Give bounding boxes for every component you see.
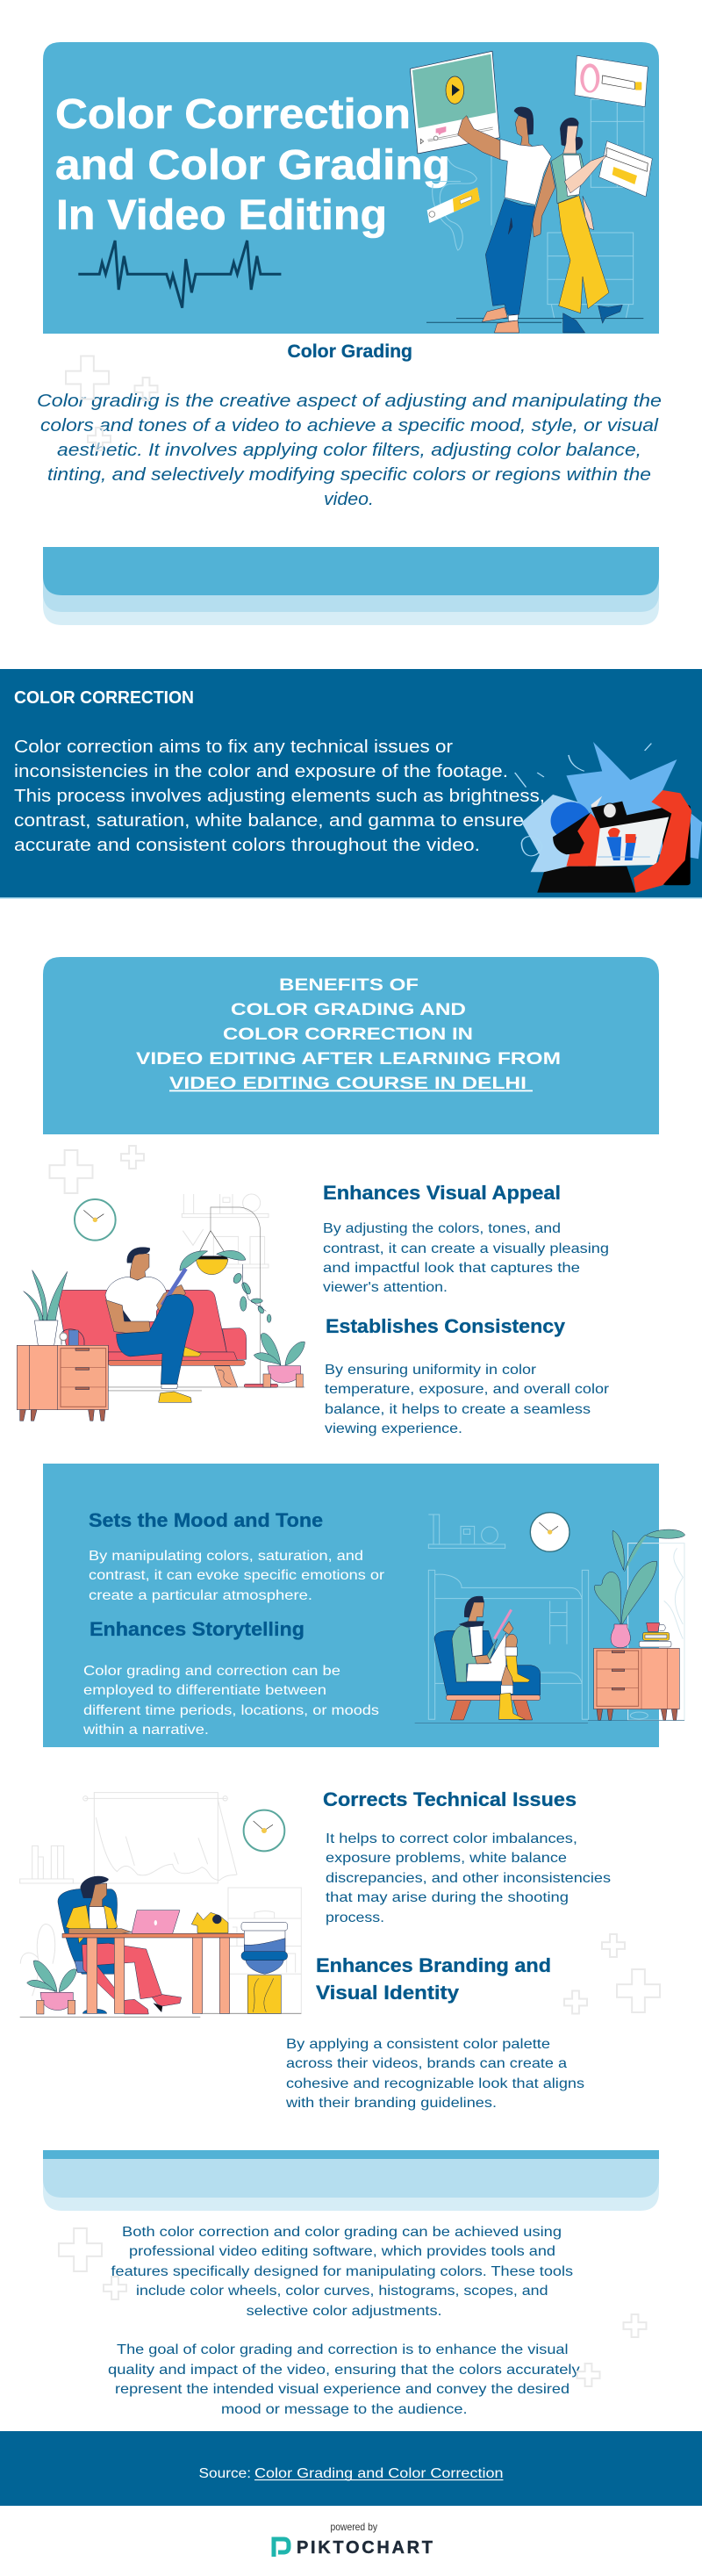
text block: color grading description: aesthetic. It involves applying color filters, adjusting color balance,	[57, 441, 641, 460]
text block: color correction description: Color correction aims to fix any technical issues or	[14, 738, 453, 757]
sofa	[57, 1290, 278, 1387]
illustration: woman at desk	[20, 1793, 301, 2017]
left plant	[24, 1270, 68, 1345]
man	[458, 107, 555, 333]
text block: closing paragraphs: represent the intended visual experience and convey the desired	[115, 2382, 569, 2397]
text block: corrects technical issues: exposure problems, white balance	[326, 1851, 567, 1866]
woman figure	[66, 1876, 182, 2014]
clock	[244, 1810, 284, 1851]
cabinet	[17, 1345, 108, 1421]
heading: corrects technical issues: Corrects Technical Issues	[323, 1788, 577, 1810]
laptop	[132, 1910, 180, 1933]
title	[55, 91, 450, 239]
cat	[191, 1912, 228, 1933]
text block: color correction description: inconsistencies in the color and exposure of the footage.	[14, 762, 508, 781]
clock	[75, 1199, 116, 1241]
heading: benefits: COLOR GRADING AND	[231, 1001, 466, 1019]
heading: benefits: COLOR CORRECTION IN	[223, 1025, 473, 1044]
plant and vase	[594, 1529, 685, 1648]
text block: corrects technical issues: discrepancies, and other inconsistencies	[326, 1871, 611, 1886]
text block: establishes consistency: By ensuring uniformity in color	[325, 1363, 537, 1378]
text block: closing paragraphs: professional video editing software, which provides tools and	[129, 2244, 555, 2259]
panel: hero banner	[43, 42, 659, 334]
panel: footer band	[0, 2431, 702, 2506]
form card	[599, 141, 652, 197]
text block: color correction description	[14, 738, 545, 855]
text block: enhances storytelling: employed to differentiate between	[83, 1683, 326, 1698]
text block: enhances branding: By applying a consistent color palette	[286, 2037, 550, 2052]
heading: benefits: VIDEO EDITING COURSE IN DELHI	[169, 1075, 526, 1093]
text block: corrects technical issues: It helps to correct color imbalances,	[326, 1831, 577, 1846]
decorative crosses	[59, 2228, 646, 2386]
text block: enhances branding: across their videos, brands can create a	[286, 2056, 567, 2071]
text block: establishes consistency: temperature, exposure, and overall color	[325, 1382, 610, 1397]
mug	[60, 1329, 84, 1345]
heading: benefits: VIDEO EDITING AFTER LEARNING FROM	[136, 1050, 561, 1069]
text block: closing paragraphs: selective color adjustments.	[247, 2304, 442, 2319]
text block: sets the mood and tone: By manipulating colors, saturation, and	[89, 1549, 363, 1564]
text block: corrects technical issues: process.	[326, 1910, 384, 1925]
text block: color correction description: accurate and consistent colors throughout the video.	[14, 836, 480, 855]
heading: enhances branding and visual identity: Visual Identity	[316, 1982, 460, 2004]
illustration: woman in armchair	[415, 1513, 685, 1723]
text block: enhances branding	[285, 2037, 584, 2111]
text block: corrects technical issues	[326, 1831, 611, 1925]
woman	[551, 118, 622, 333]
office chair	[58, 1889, 118, 2013]
pink pot plant	[254, 1334, 304, 1387]
text block: closing paragraphs: The goal of color grading and correction is to enhance the visual	[117, 2342, 569, 2357]
desk	[62, 1933, 259, 2013]
text block: establishes consistency: viewing experience.	[325, 1421, 462, 1436]
text block: closing paragraphs: mood or message to the audience.	[221, 2402, 468, 2417]
text block: color grading description: colors and tones of a video to achieve a specific mood, style, or visual	[40, 416, 659, 435]
cabinet	[594, 1648, 679, 1720]
heading: enhances visual appeal: Enhances Visual Appeal	[323, 1182, 561, 1204]
water cooler	[241, 1922, 288, 2013]
source line: Color Grading and Color Correction	[254, 2466, 504, 2481]
illustration: person with camera	[515, 742, 702, 893]
text block: color correction description: This process involves adjusting elements such as brightness,	[14, 787, 545, 806]
search bar	[427, 187, 480, 223]
heading: color grading: Color Grading	[288, 342, 412, 362]
profile card	[575, 55, 648, 107]
text block: enhances storytelling: different time periods, locations, or moods	[83, 1703, 379, 1718]
text block: establishes consistency	[325, 1363, 610, 1436]
text block: enhances visual appeal: viewer's attention.	[323, 1280, 448, 1295]
text block: enhances storytelling: Color grading and correction can be	[83, 1664, 340, 1679]
text block: color grading description: video.	[324, 490, 374, 509]
stacked rounded band	[43, 547, 659, 625]
text block: closing paragraphs	[108, 2225, 580, 2417]
decorative crosses	[49, 1146, 144, 1193]
title: In Video Editing	[56, 192, 387, 239]
text block: closing paragraphs: include color wheels, color curves, histograms, scopes, and	[136, 2284, 548, 2299]
text block: establishes consistency: balance, it helps to create a seamless	[325, 1402, 591, 1417]
text block: color grading description: Color grading is the creative aspect of adjusting and manipulating the	[37, 392, 662, 411]
icon: piktochart logo	[274, 2539, 289, 2557]
heading: enhances branding and visual identity	[316, 1954, 551, 2004]
heading: establishes consistency: Establishes Consistency	[326, 1315, 566, 1337]
text block: sets the mood and tone	[89, 1549, 385, 1603]
panel: mood and storytelling	[43, 1464, 659, 1747]
panel: benefits heading	[43, 957, 659, 1134]
pink pot plant	[27, 1961, 76, 2014]
illustration: man on sofa	[17, 1194, 304, 1421]
heading: benefits	[136, 976, 561, 1093]
armchair	[434, 1630, 541, 1720]
text block: sets the mood and tone: contrast, it can evoke specific emotions or	[89, 1568, 385, 1583]
illustration: two people with video panels	[410, 51, 652, 333]
heading: sets the mood and tone: Sets the Mood and Tone	[89, 1509, 323, 1531]
title: Color Correction	[55, 91, 411, 138]
woman figure	[452, 1596, 530, 1719]
stacked rounded band	[43, 2150, 659, 2211]
clock	[530, 1513, 569, 1551]
text block: enhances visual appeal: contrast, it can create a visually pleasing	[323, 1241, 609, 1256]
text block: sets the mood and tone: create a particular atmosphere.	[89, 1588, 312, 1603]
text block: color grading description: tinting, and selectively modifying specific colors or regions within the	[47, 465, 651, 485]
panel: color correction	[0, 669, 702, 899]
text block: color correction description: contrast, saturation, white balance, and gamma to ensure	[14, 811, 524, 831]
text block: closing paragraphs: quality and impact of the video, ensuring that the colors accurately	[108, 2363, 580, 2378]
text block: corrects technical issues: that may arise during the shooting	[326, 1890, 569, 1905]
heading: enhances branding and visual identity: Enhances Branding and	[316, 1954, 551, 1976]
text block: enhances branding: with their branding guidelines.	[285, 2096, 497, 2111]
decorative crosses	[66, 356, 158, 450]
powered by label: powered by	[330, 2521, 377, 2533]
text block: enhances branding: cohesive and recognizable look that aligns	[286, 2076, 584, 2091]
text block: closing paragraphs: Both color correction and color grading can be achieved using	[122, 2225, 562, 2240]
hanging plant	[180, 1250, 271, 1322]
text block: enhances visual appeal: and impactful look that captures the	[323, 1261, 580, 1276]
decorative crosses	[564, 1934, 660, 2014]
video card	[410, 51, 499, 154]
heading: benefits: BENEFITS OF	[279, 976, 419, 995]
text block: enhances storytelling: within a narrative.	[82, 1723, 209, 1738]
heading: color correction: COLOR CORRECTION	[14, 688, 194, 708]
icon: heartbeat line	[78, 241, 281, 308]
title: and Color Grading	[55, 142, 450, 189]
man figure	[105, 1248, 201, 1402]
heading: enhances storytelling: Enhances Storytelling	[90, 1618, 304, 1640]
text block: color grading description	[37, 392, 662, 509]
text block: enhances visual appeal: By adjusting the colors, tones, and	[323, 1221, 561, 1236]
text block: enhances visual appeal	[323, 1221, 609, 1295]
text block: enhances storytelling	[82, 1664, 379, 1738]
source line: Source:	[198, 2466, 251, 2481]
text block: closing paragraphs: features specifically designed for manipulating colors. These tools	[111, 2264, 573, 2279]
piktochart wordmark: PIKTOCHART	[297, 2538, 433, 2558]
books and cup	[639, 1623, 671, 1647]
